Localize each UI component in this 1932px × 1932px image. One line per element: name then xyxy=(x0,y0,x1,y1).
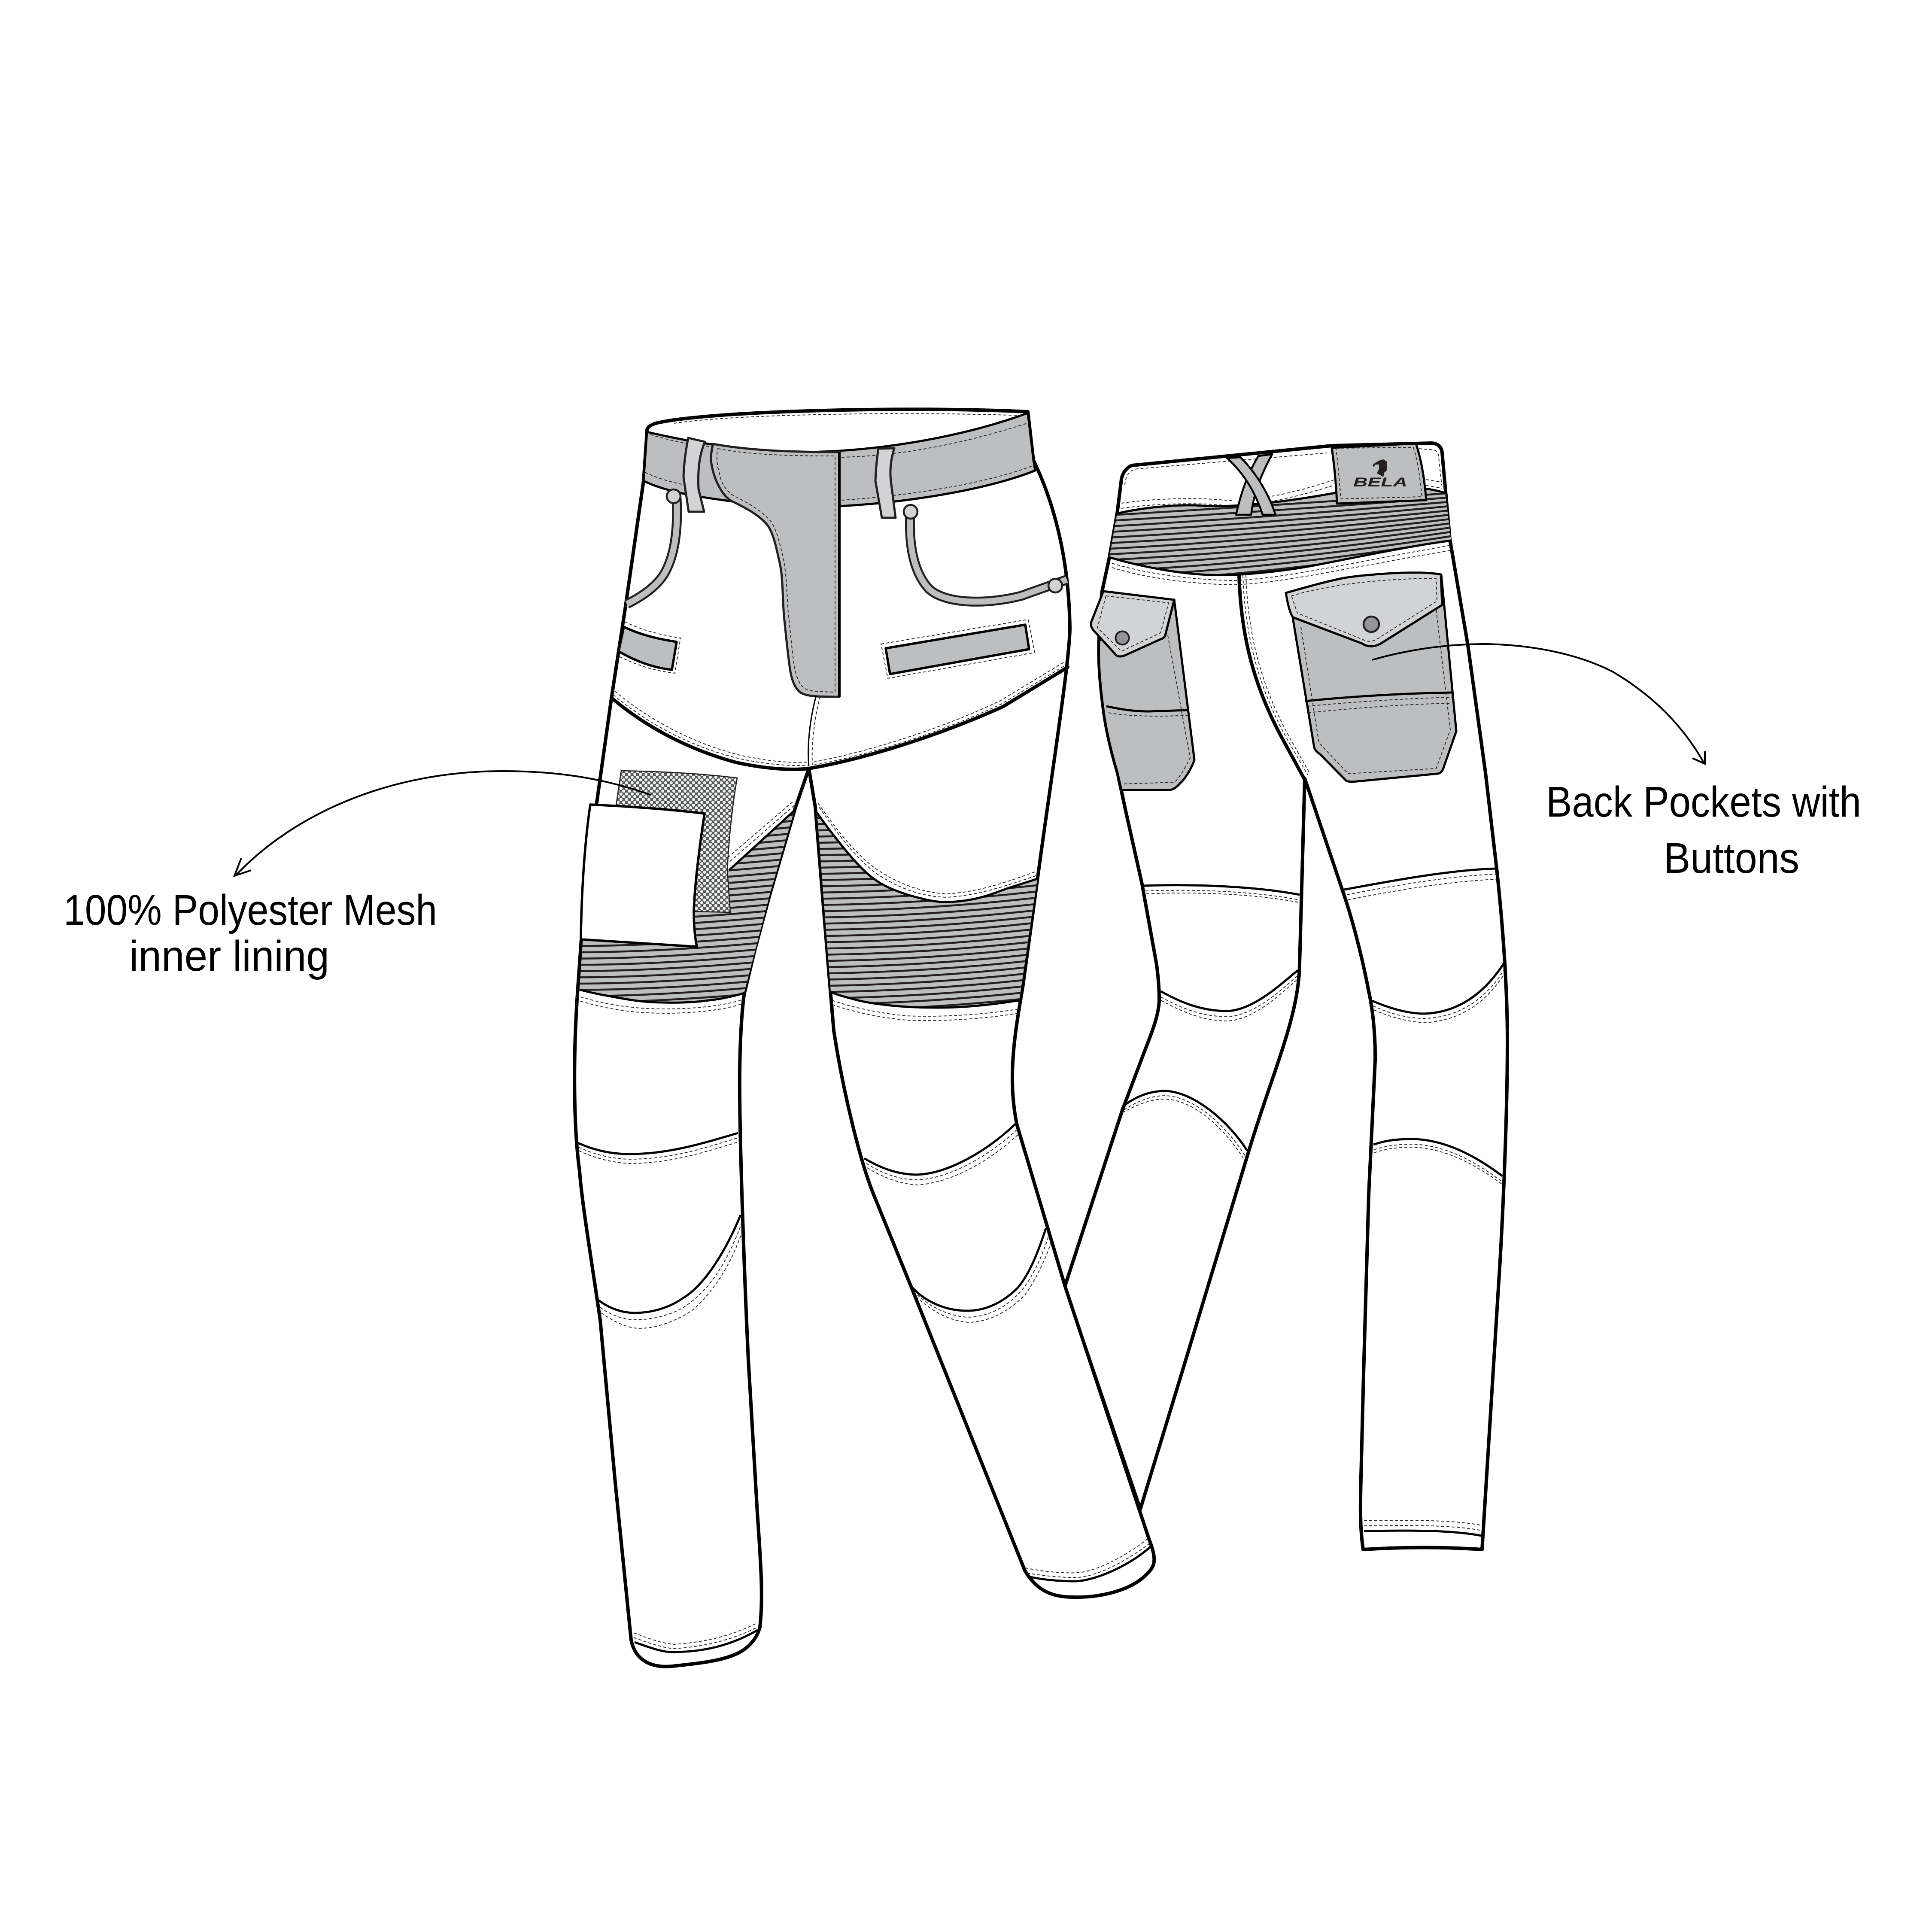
rivet xyxy=(1048,579,1062,592)
callout: back pockets xyxy=(1372,644,1861,882)
back waistband stitching xyxy=(1121,449,1442,508)
welt pocket left xyxy=(618,622,680,673)
belt loop left xyxy=(683,438,705,512)
icon: button xyxy=(1364,617,1379,632)
arrow: mesh lining leader xyxy=(234,771,651,876)
seat seam xyxy=(1112,545,1450,781)
icon: lion head logo xyxy=(1373,459,1387,477)
fly panel xyxy=(711,444,839,697)
front view of pants xyxy=(574,409,1154,1667)
label text xyxy=(64,886,437,980)
back knee panel seams xyxy=(1122,869,1504,1536)
brand label xyxy=(1332,444,1426,504)
label text: 100% Polyester Mesh xyxy=(64,886,437,934)
mesh lining xyxy=(616,771,737,912)
ribbed panel left thigh xyxy=(575,802,799,1013)
icon: button xyxy=(1115,631,1129,645)
back view of pants xyxy=(1065,443,1507,1549)
arrow: back pocket leader xyxy=(1372,644,1705,764)
brand name: BELA xyxy=(1353,475,1407,489)
coin pocket piping left xyxy=(627,489,680,604)
label text: Back Pockets with xyxy=(1546,778,1861,826)
coin pocket piping right xyxy=(904,505,1067,601)
open pocket flap xyxy=(581,805,705,947)
welt pocket right xyxy=(881,620,1035,678)
belt loop right xyxy=(875,448,896,518)
rivet xyxy=(667,489,680,503)
rivet xyxy=(904,505,917,519)
waistband xyxy=(644,413,1035,506)
ribbed yoke band xyxy=(1109,487,1453,582)
label text: inner lining xyxy=(129,932,329,980)
label text: Buttons xyxy=(1664,834,1799,882)
front pants outline xyxy=(574,409,1154,1667)
yoke seam xyxy=(611,661,1068,769)
callout: mesh lining xyxy=(64,771,651,980)
left back pocket xyxy=(1091,591,1194,790)
belt straps crossed xyxy=(1227,454,1276,515)
ribbed panel right thigh xyxy=(816,803,1039,1021)
label text xyxy=(1546,778,1861,882)
right back pocket xyxy=(1286,573,1456,782)
back pants outline xyxy=(1065,443,1507,1549)
front knee panel seams xyxy=(578,1124,1151,1652)
